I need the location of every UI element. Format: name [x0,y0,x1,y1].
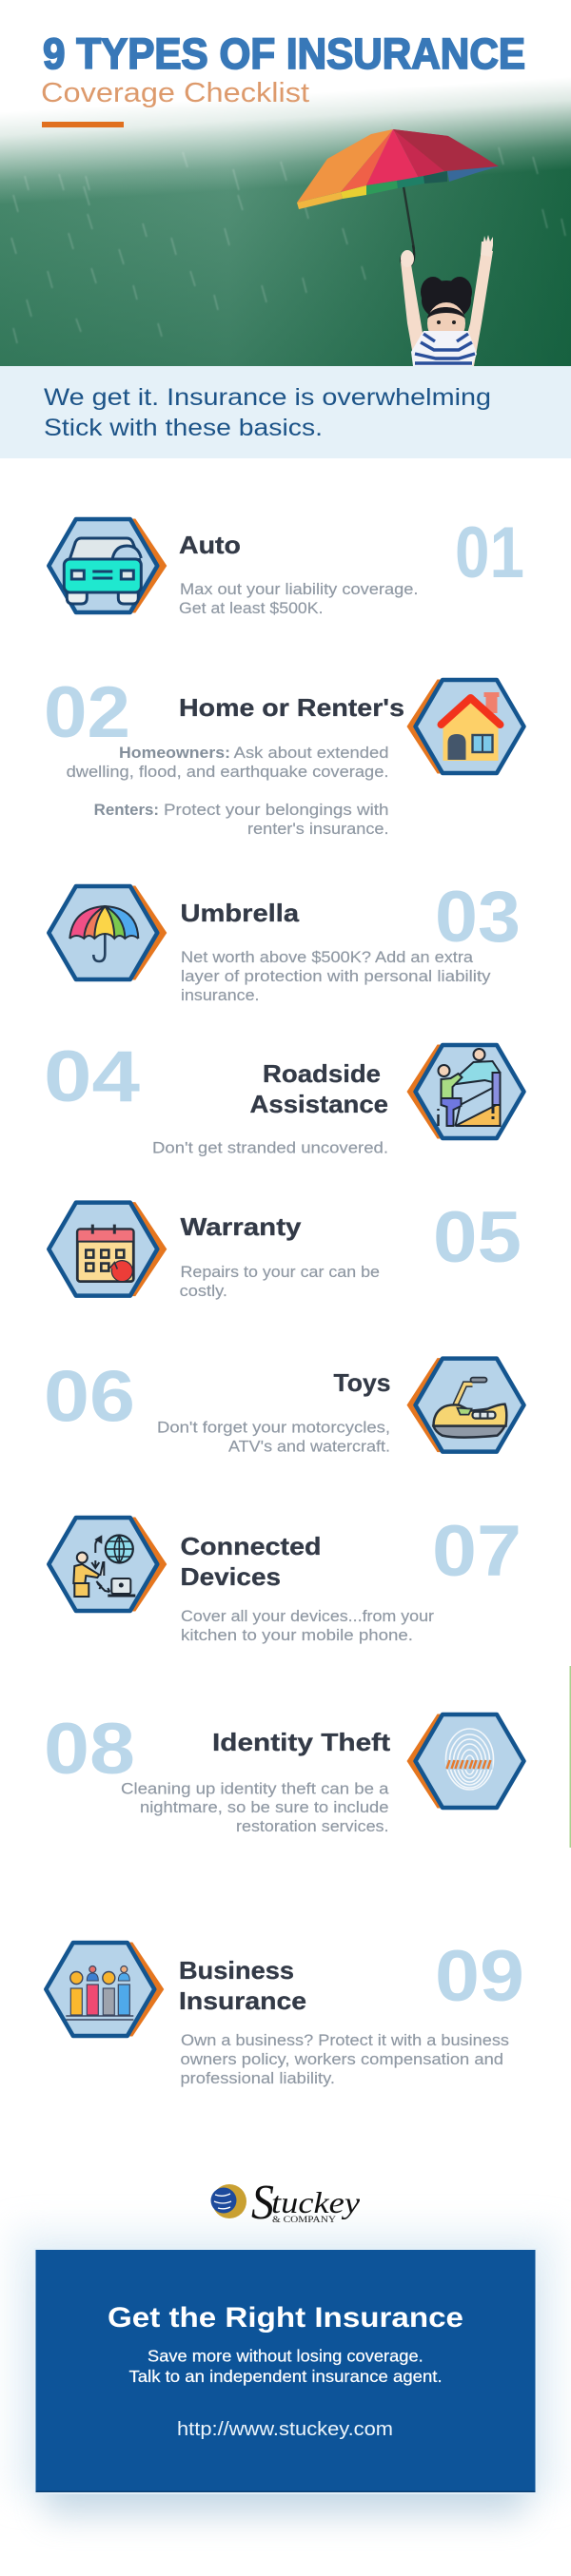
panel: 05 warranty [49,1197,522,1300]
icon: calendar [49,1202,167,1296]
subtitle: Coverage Checklist [41,78,309,108]
heading: Home or Renter's [179,693,404,722]
heading: Umbrella [181,899,300,927]
description: Don't forget your motorcycles, [157,1420,390,1437]
panel: 06 toys [44,1356,523,1456]
umbrella [297,124,499,266]
icon: business bars [46,1942,164,2037]
title accent rule [42,122,124,127]
intro band: We get it. Insurance is overwhelming [44,384,491,411]
icon: person, globe and laptop [49,1518,167,1611]
description: professional liability. [181,2070,335,2087]
white fade at the top of the photo [0,0,571,249]
website link: http://www.stuckey.com [177,2419,393,2440]
number: 02 [44,672,130,753]
description: Cleaning up identity theft can be a [121,1780,389,1797]
number: 05 [433,1197,522,1278]
message: Talk to an independent insurance agent. [129,2367,443,2386]
number: 08 [44,1709,135,1790]
heading: Warranty [181,1212,302,1241]
heading: Assistance [249,1090,388,1118]
description: insurance. [181,987,259,1004]
heading: Devices [181,1562,281,1591]
description: costly. [180,1283,227,1300]
number: 01 [455,513,524,593]
description: layer of protection with personal liability [181,968,491,985]
description: Don't get stranded uncovered. [152,1139,388,1156]
description [181,1608,435,1644]
rain streaks [11,147,565,343]
panel: 03 umbrella [49,877,521,1004]
heading: Identity Theft [212,1728,390,1756]
description: Max out your liability coverage. [180,581,419,598]
icon: house [407,679,523,774]
heading: Business [179,1956,294,1985]
description: Own a business? Protect it with a business [181,2032,509,2049]
logo: Stuckey & Company [211,2176,361,2230]
logo: Stuckey & Company: tuckey [271,2185,361,2219]
logo mark [211,2184,246,2218]
description: Get at least $500K. [179,600,324,617]
icon: car [49,519,167,612]
description: Repairs to your car can be [181,1264,380,1281]
edge line [569,1666,571,1848]
description: Cover all your devices...from your [181,1608,435,1625]
description [181,949,491,1004]
icon: umbrella [49,886,167,979]
heading: Roadside [263,1059,381,1088]
message [129,2347,443,2386]
description: nightmare, so be sure to include [140,1799,388,1816]
description: kitchen to your mobile phone. [181,1627,413,1644]
description [157,1420,390,1456]
description: Net worth above $500K? Add an extra [181,949,474,966]
heading [249,1059,388,1118]
description [179,581,419,617]
number: 06 [44,1356,135,1438]
number: 03 [435,877,521,958]
heading: Get the Right Insurance [108,2302,463,2334]
heading: Toys [333,1368,390,1397]
description [67,745,388,838]
icon: watercraft [407,1358,523,1452]
description: Renters: [94,802,159,819]
number: 04 [44,1036,140,1117]
heading [179,1956,306,2015]
description [121,1780,389,1835]
description: renter's insurance. [247,821,388,838]
call to action shadow [13,2230,558,2517]
description [181,2032,509,2087]
icon: people helping on a hill [407,1044,523,1139]
number: 09 [435,1936,524,2017]
heading: Connected [181,1532,322,1560]
panel: 02 home or renter's [44,672,523,838]
call to action panel [34,2248,537,2494]
number: 07 [432,1511,522,1592]
icon: fingerprint [407,1714,523,1809]
heading [181,1532,322,1591]
description [180,1264,380,1300]
heading: Auto [179,531,241,559]
message: Save more without losing coverage. [148,2347,423,2366]
description: dwelling, flood, and earthquake coverage. [67,764,388,781]
hero photo: child with umbrella in the rain [0,0,571,366]
panel: 08 identity theft [44,1709,523,1835]
panel: 04 roadside assistance [44,1036,523,1156]
panel: 07 connected devices [49,1511,522,1644]
description: restoration services. [236,1818,388,1835]
intro band [0,366,571,458]
logo: Stuckey & Company: & COMPANY [272,2215,337,2224]
description: ATV's and watercraft. [228,1439,390,1456]
description: Ask about extended [234,745,388,762]
heading: Insurance [179,1986,306,2015]
panel: 09 business insurance [46,1936,524,2087]
description: Protect your belongings with [164,802,388,819]
child [401,235,493,366]
description: Homeowners: [119,745,230,762]
description: owners policy, workers compensation and [181,2051,503,2068]
panel: 01 auto [49,513,524,617]
title: 9 TYPES OF INSURANCE [43,29,525,78]
intro band: Stick with these basics. [44,415,323,441]
logo: Stuckey & Company: S [251,2176,274,2230]
